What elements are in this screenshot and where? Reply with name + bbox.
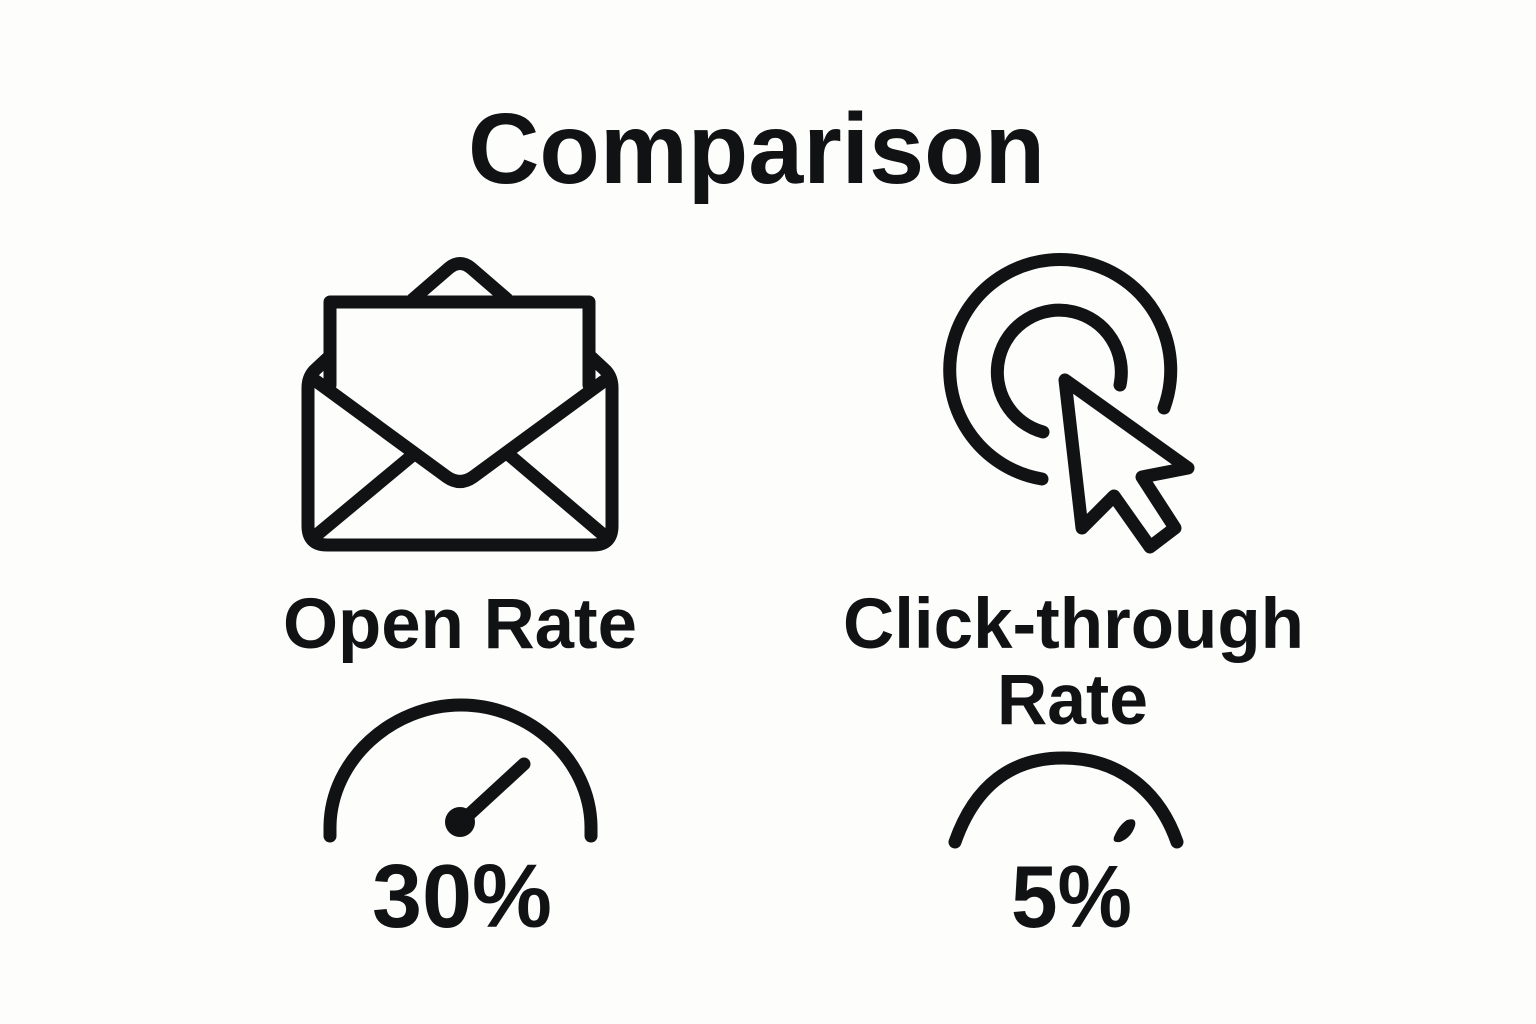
label: click-through rate [843, 585, 1304, 740]
value: 5%: 5% [1011, 847, 1132, 946]
icon: cursor click [950, 260, 1188, 547]
gauge: open rate [330, 705, 591, 837]
title: Comparison [468, 93, 1045, 205]
gauge: click-through rate [955, 758, 1177, 842]
label: open rate: Open Rate [283, 585, 637, 664]
icon: open envelope [308, 264, 612, 545]
label: click-through rate: Click-through [843, 585, 1304, 664]
label: click-through rate: Rate [997, 661, 1148, 740]
value: 30%: 30% [372, 847, 552, 947]
